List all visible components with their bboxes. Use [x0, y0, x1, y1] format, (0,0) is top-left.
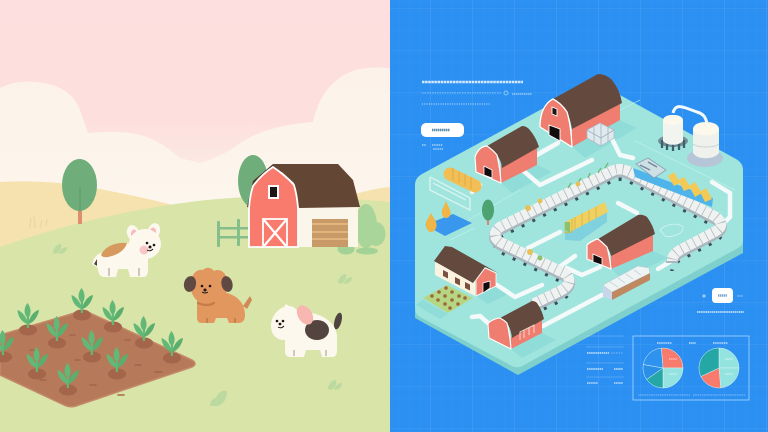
hay rolls	[450, 174, 475, 186]
processing unit	[587, 123, 614, 146]
barn B	[475, 126, 539, 183]
barn window	[268, 185, 279, 199]
faint grass on hill	[30, 216, 47, 228]
barn A	[540, 74, 622, 147]
barn roof	[273, 164, 360, 208]
barn E	[488, 301, 544, 349]
barn D long house	[434, 246, 498, 296]
pie value labels	[669, 359, 733, 374]
clouds	[0, 67, 390, 215]
silo large	[687, 122, 723, 167]
vegetable plot	[423, 285, 473, 313]
chart footnotes	[638, 394, 745, 396]
blue pond	[425, 214, 472, 236]
grass tufts	[53, 244, 352, 406]
crops along conveyor	[525, 163, 608, 260]
barn door	[263, 219, 287, 247]
platform top	[415, 82, 743, 367]
small caption	[422, 145, 443, 149]
dog: white with dark patch	[271, 302, 344, 357]
hay crates	[565, 202, 608, 241]
sprouts	[0, 288, 183, 396]
barn side wall	[297, 206, 358, 247]
wash line with yellow crates	[633, 158, 713, 207]
barn	[247, 164, 360, 247]
header text lines	[422, 82, 532, 104]
dog: white with brown patch	[92, 222, 162, 277]
fence	[217, 219, 250, 247]
tree behind barn	[238, 155, 268, 207]
conveyor belt	[495, 169, 721, 314]
silos	[658, 107, 723, 167]
barn red front	[249, 167, 298, 247]
barn garage door	[312, 219, 348, 247]
soil specks	[30, 335, 162, 395]
dog: orange puppy	[182, 268, 252, 323]
barn C	[587, 215, 655, 269]
pie chart 1	[643, 348, 683, 388]
greenhouse trailer	[603, 266, 650, 300]
pie chart 2	[699, 348, 739, 388]
platform side	[415, 240, 743, 375]
white connecting paths	[472, 135, 730, 326]
dashed outline marker	[660, 224, 683, 236]
bushes	[338, 204, 386, 254]
sky	[0, 0, 390, 210]
fenced pen	[430, 177, 470, 210]
tree on platform	[482, 200, 494, 225]
crop field soil	[0, 311, 195, 407]
panel: blueprint background	[390, 0, 768, 432]
green meadow	[0, 197, 390, 432]
data table	[586, 336, 624, 383]
tree left	[62, 159, 97, 224]
chart panel with two pies	[633, 336, 749, 400]
pear trees	[426, 201, 451, 232]
isometric platform	[415, 82, 743, 375]
button	[421, 123, 464, 137]
building shadows	[416, 120, 668, 358]
yellow hills	[0, 181, 390, 260]
faint plan lines	[450, 100, 735, 240]
silo small	[658, 115, 688, 151]
panel: cute farm scene	[0, 0, 390, 432]
chart labels	[657, 342, 728, 344]
callout label	[697, 288, 744, 312]
